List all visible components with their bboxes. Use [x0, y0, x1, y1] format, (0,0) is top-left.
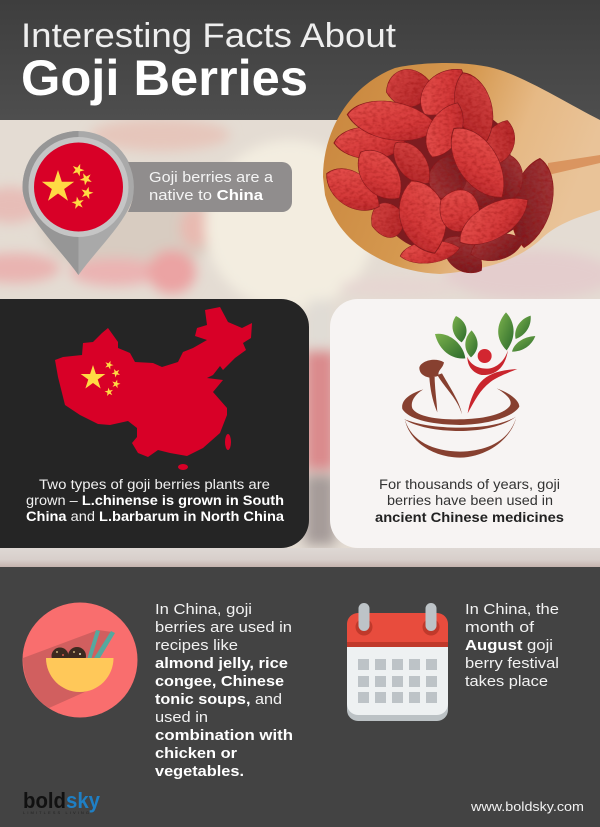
- recipes text: recipes like: [155, 637, 238, 654]
- callout: native to China: Goji berries are a: [149, 169, 274, 186]
- map of China: [55, 307, 252, 470]
- festival text: [465, 601, 559, 690]
- icon: calendar: [347, 603, 448, 721]
- festival text: takes place: [465, 673, 548, 690]
- plant types text: [26, 477, 285, 524]
- festival text: In China, the: [465, 601, 559, 618]
- medicines text: For thousands of years, goji: [379, 477, 560, 492]
- footer band: [0, 567, 600, 827]
- website url: www.boldsky.com: [470, 799, 584, 814]
- title: Interesting Facts About: [21, 17, 397, 55]
- title: Goji Berries: [21, 50, 308, 106]
- callout: native to China: [128, 162, 292, 212]
- recipes text: tonic soups, and: [155, 691, 282, 708]
- recipes text: vegetables.: [155, 763, 244, 780]
- panel: plant types: [0, 299, 309, 548]
- logo: boldsky: boldsky: [23, 788, 101, 813]
- icon: food bowl: [22, 602, 138, 718]
- recipes text: used in: [155, 709, 208, 726]
- wooden spoon with goji berries: [318, 58, 600, 282]
- location pin with China flag: [22, 131, 134, 275]
- recipes text: In China, goji: [155, 601, 252, 618]
- callout: native to China: native to China: [149, 187, 264, 204]
- panel: ancient medicines: [330, 299, 600, 548]
- medicines text: ancient Chinese medicines: [375, 510, 564, 525]
- festival text: August goji: [465, 637, 553, 654]
- background photo band: [0, 119, 600, 567]
- header band: [0, 0, 600, 120]
- logo: boldsky: LIMITLESS LIVING: [23, 810, 89, 815]
- medicines text: berries have been used in: [387, 493, 553, 508]
- recipes text: almond jelly, rice: [155, 655, 288, 672]
- title: [21, 17, 397, 106]
- recipes text: combination with: [155, 727, 293, 744]
- festival text: berry festival: [465, 655, 559, 672]
- festival text: month of: [465, 619, 535, 636]
- plant types text: Two types of goji berries plants are: [39, 477, 270, 492]
- recipes text: [155, 601, 293, 780]
- plant types text: grown – L.chinense is grown in South: [26, 493, 284, 508]
- plant types text: China and L.barbarum in North China: [26, 509, 285, 524]
- recipes text: chicken or: [155, 745, 237, 762]
- icon: mortar, pestle and leaves: [402, 312, 535, 458]
- medicines text: [375, 477, 564, 525]
- recipes text: congee, Chinese: [155, 673, 284, 690]
- recipes text: berries are used in: [155, 619, 292, 636]
